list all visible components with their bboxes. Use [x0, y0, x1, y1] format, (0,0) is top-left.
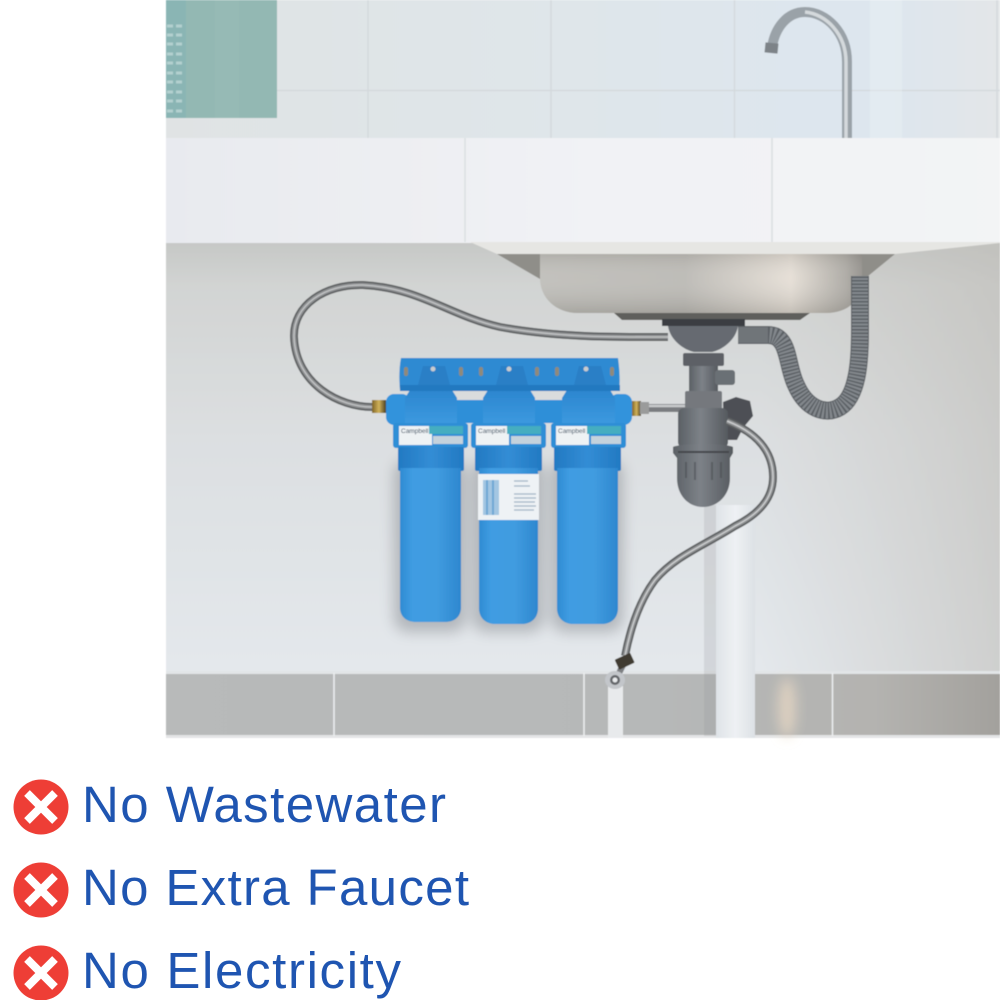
icon: red cross: [14, 862, 68, 918]
filter 3: Campbell: [558, 428, 586, 435]
brass fittings: [372, 400, 649, 416]
white drain pipe: [704, 505, 755, 738]
outlet braided hose (right): [625, 421, 773, 656]
skirting tiles: [166, 671, 1000, 738]
filter 2: Campbell: [478, 428, 506, 435]
tiled wall above counter: [166, 0, 1000, 138]
feature: no electricity: No Electricity: [82, 942, 402, 999]
sink bowl: [497, 254, 895, 320]
filter 3: [551, 390, 626, 624]
rear drain nut: [723, 397, 753, 440]
counter underside lip: [470, 242, 1000, 254]
feature list: [14, 776, 469, 1000]
shutoff valve and white supply pipe: [605, 653, 635, 738]
chrome faucet: [771, 12, 847, 138]
countertop front: [166, 138, 1000, 243]
window: [166, 0, 277, 118]
inlet braided hose (left): [294, 285, 668, 407]
icon: red cross: [14, 946, 68, 1000]
lower wall: [166, 243, 1000, 673]
ports and connectors: [386, 394, 632, 425]
three-stage water filter: [386, 358, 632, 624]
sink trap: [662, 319, 745, 507]
outlet hose to filter: [645, 406, 690, 408]
filter 2: [471, 390, 546, 624]
corrugated drain hose: [738, 276, 860, 411]
filter 1: [393, 390, 468, 622]
photo: kitchen under-sink installation: [166, 0, 1000, 738]
filter 1: Campbell: [401, 428, 429, 435]
product spec sticker: [478, 474, 539, 520]
feature: no wastewater: No Wastewater: [82, 776, 446, 833]
filter shadows: [394, 460, 623, 632]
icon: red cross: [14, 780, 68, 834]
feature: no extra faucet: No Extra Faucet: [82, 859, 469, 916]
mounting bracket: [399, 358, 620, 391]
